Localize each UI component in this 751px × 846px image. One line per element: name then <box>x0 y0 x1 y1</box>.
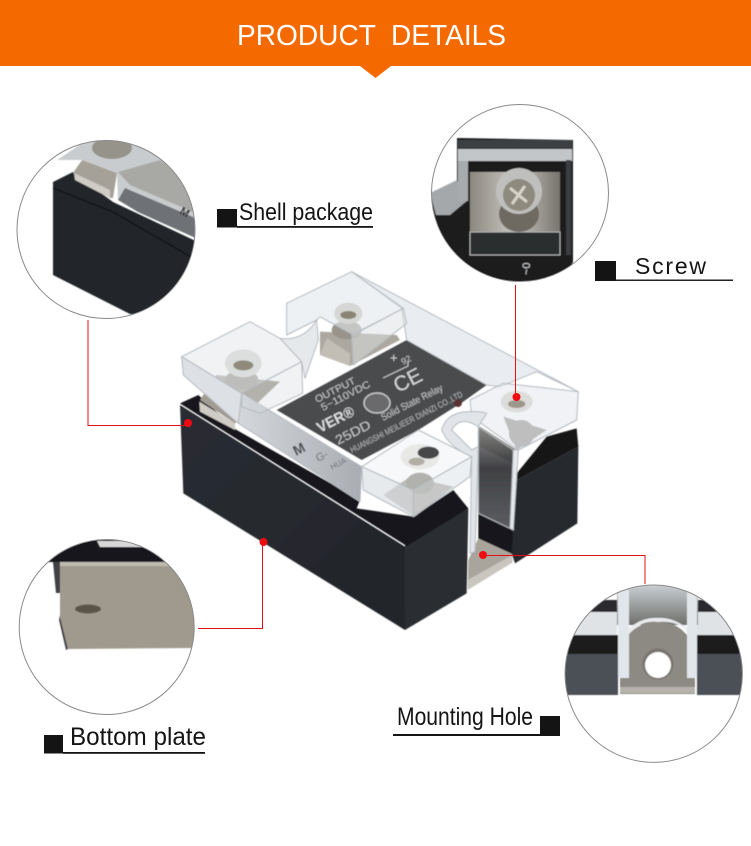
label text: CE <box>390 364 426 397</box>
cover: rear band <box>352 272 578 392</box>
label: screw: Screw <box>635 253 706 279</box>
detail circle: shell package: M <box>178 205 191 220</box>
detail circle: screw <box>430 104 608 290</box>
cover band text: M <box>290 439 308 459</box>
main product: solid state relay <box>180 272 578 630</box>
label text: Solid State Relay <box>379 383 445 424</box>
detail circle: mounting hole <box>560 585 747 762</box>
callout: mounting hole <box>479 551 645 584</box>
cover band text: HUA <box>329 456 349 472</box>
label text: + <box>390 350 398 365</box>
callout: bottom plate <box>198 538 268 628</box>
detail circle: screw: ~0 <box>521 262 533 275</box>
label: shell package: Shell package <box>239 199 373 226</box>
label text: VER® <box>314 403 357 437</box>
detail circle: shell package <box>17 137 200 320</box>
label text: OUTPUT <box>313 376 358 406</box>
cover: front band <box>238 393 362 502</box>
detail circle: bottom plate <box>19 535 195 714</box>
cover: arch by left tab <box>280 320 318 378</box>
title: PRODUCT DETAILS <box>237 20 506 52</box>
callout lines and dots <box>88 285 645 628</box>
label: bottom plate: Bottom plate <box>70 723 206 751</box>
label: screw <box>595 253 733 281</box>
label text: HUANGSHI MEILIEER DIANZI CO.,LTD <box>348 389 464 455</box>
cover: U channel <box>478 427 513 530</box>
cover: upper tab <box>287 272 403 335</box>
cover band text <box>290 439 349 472</box>
callout: shell package <box>88 320 192 427</box>
label panel and metal terminals <box>199 321 547 517</box>
label text: 25DD <box>333 417 373 448</box>
label text: 5~110VDC <box>319 379 372 414</box>
cover: right tab <box>470 383 578 450</box>
header banner <box>0 0 751 78</box>
relay black housing <box>180 395 578 630</box>
clear plastic cover <box>182 272 578 553</box>
callout: screw <box>512 285 520 401</box>
label: mounting hole: Mounting Hole <box>397 703 533 731</box>
cover: front tab <box>362 430 472 490</box>
cover: left tab <box>182 322 302 393</box>
label text: 92 <box>399 353 413 367</box>
label text <box>313 350 464 455</box>
cover band text: G- <box>314 448 331 465</box>
screw heads <box>225 303 533 469</box>
